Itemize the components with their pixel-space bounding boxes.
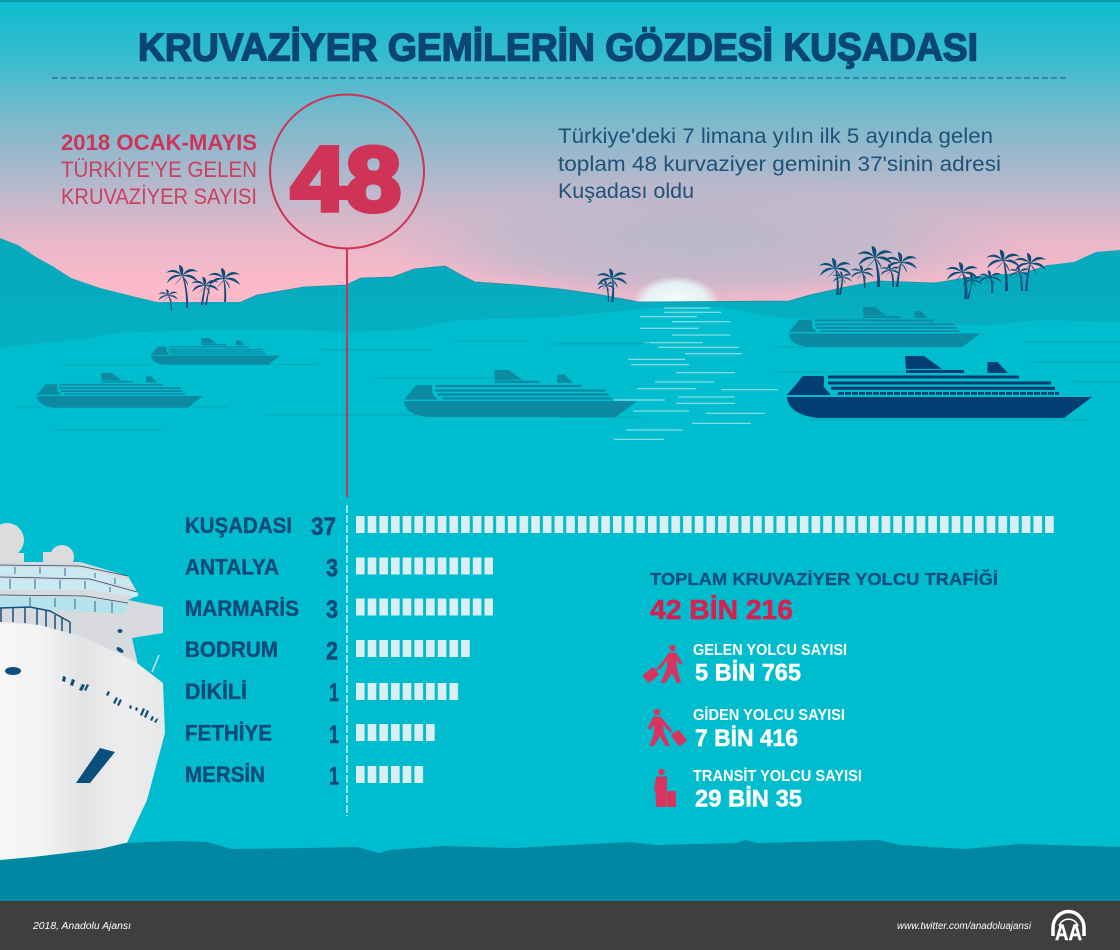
row: Fethiye: FETHİYE: [185, 720, 272, 746]
superstructure: [0, 562, 163, 675]
row: Kuşadası: [185, 513, 1054, 541]
description paragraph: [558, 124, 1001, 203]
row: Mersin: [185, 762, 424, 790]
callout: circle with 48: [270, 94, 424, 248]
row: Fethiye: [185, 720, 435, 749]
palm trees: right cluster: [946, 249, 1046, 299]
palm trees: left cluster: [158, 265, 240, 311]
callout: total count label: [61, 130, 257, 209]
row: Dikili: [185, 679, 458, 707]
port chart: [185, 513, 1054, 790]
callout: circle with 48: 48: [291, 130, 401, 230]
glass decks: [0, 567, 137, 614]
ship: back right: [789, 307, 980, 347]
row: Bodrum: [185, 637, 470, 666]
logo: Anadolu Ajansi: [1053, 911, 1084, 945]
sun reflection on water: [614, 308, 778, 439]
row: Antalya: ANTALYA: [185, 554, 279, 580]
arriving label: GELEN YOLCU SAYISI: [693, 642, 847, 659]
row: Antalya: [185, 554, 493, 582]
row: Marmaris: [185, 596, 493, 624]
title divider: [52, 77, 1068, 79]
row: Kuşadası: KUŞADASI: [185, 513, 292, 538]
icon: arriving passenger: [642, 645, 682, 683]
row: Bodrum: BODRUM: [185, 637, 278, 662]
footer bar: 2018, Anadolu Ajansı: [32, 921, 131, 932]
row: Marmaris: 3: [326, 596, 338, 624]
traffic total: 42 BİN 216: [650, 594, 793, 625]
ship: far left: [37, 373, 203, 408]
palm trees: right middle cluster: [819, 246, 917, 295]
row: Bodrum: 2: [326, 638, 338, 666]
ship: large navy: [787, 356, 1092, 418]
departing value: 7 BİN 416: [695, 725, 798, 752]
description paragraph: toplam 48 kurvaziyer geminin 37'sinin adresi: [558, 152, 1001, 176]
passenger traffic panel: [642, 568, 998, 812]
hull: [0, 622, 165, 860]
departing label: GİDEN YOLCU SAYISI: [693, 707, 845, 724]
hill ridge line: [161, 265, 1049, 303]
row: Fethiye: 1: [329, 721, 339, 749]
row: Kuşadası: 37: [311, 513, 336, 541]
hills: [0, 238, 1120, 348]
port chart divider: [346, 505, 348, 816]
mast: [152, 655, 159, 672]
callout: total count label: TÜRKİYE’YE GELEN: [61, 157, 257, 182]
palm trees: centre: [597, 269, 627, 302]
icon: transit passenger: [654, 769, 676, 807]
arriving value: 5 BİN 765: [695, 660, 801, 686]
icon: departing passenger: [648, 709, 687, 747]
row: Mersin: MERSİN: [185, 762, 265, 787]
sun: [633, 276, 719, 328]
ship: back left: [151, 338, 280, 365]
ship: centre: [404, 370, 637, 417]
row: Dikili: DİKİLİ: [185, 679, 247, 704]
railing: [0, 607, 70, 636]
row: Marmaris: MARMARİS: [185, 596, 299, 621]
logo: Anadolu Ajansi: AA: [1055, 920, 1082, 945]
footer bar: [0, 901, 1120, 950]
large cruise ship in foreground: [0, 523, 165, 860]
sea ripples: [16, 341, 1120, 430]
foreground dark water: [0, 840, 1120, 902]
callout: total count label: 2018 OCAK-MAYIS: [61, 130, 257, 155]
title: KRUVAZİYER GEMİLERİN GÖZDESİ KUŞADASI: [138, 26, 978, 70]
row: Dikili: 1: [329, 679, 339, 707]
description paragraph: Türkiye'deki 7 limana yılın ilk 5 ayında gelen: [558, 124, 993, 148]
row: Mersin: 1: [329, 762, 339, 790]
traffic heading: TOPLAM KRUVAZİYER YOLCU TRAFİĞİ: [650, 568, 998, 589]
transit value: 29 BİN 35: [695, 786, 802, 812]
callout: total count label: KRUVAZİYER SAYISI: [61, 184, 257, 209]
description paragraph: Kuşadası oldu: [558, 179, 694, 203]
radar domes: [0, 523, 74, 569]
transit label: TRANSİT YOLCU SAYISI: [693, 768, 862, 785]
row: Antalya: 3: [326, 554, 338, 582]
sea: [0, 302, 1120, 905]
footer bar: www.twitter.com/anadoluajansi: [897, 921, 1032, 932]
deck lines: [0, 565, 137, 613]
sky background: [0, 0, 1120, 310]
connector line: [346, 248, 348, 497]
hull details: [5, 667, 158, 783]
anchor openings: [116, 629, 124, 654]
